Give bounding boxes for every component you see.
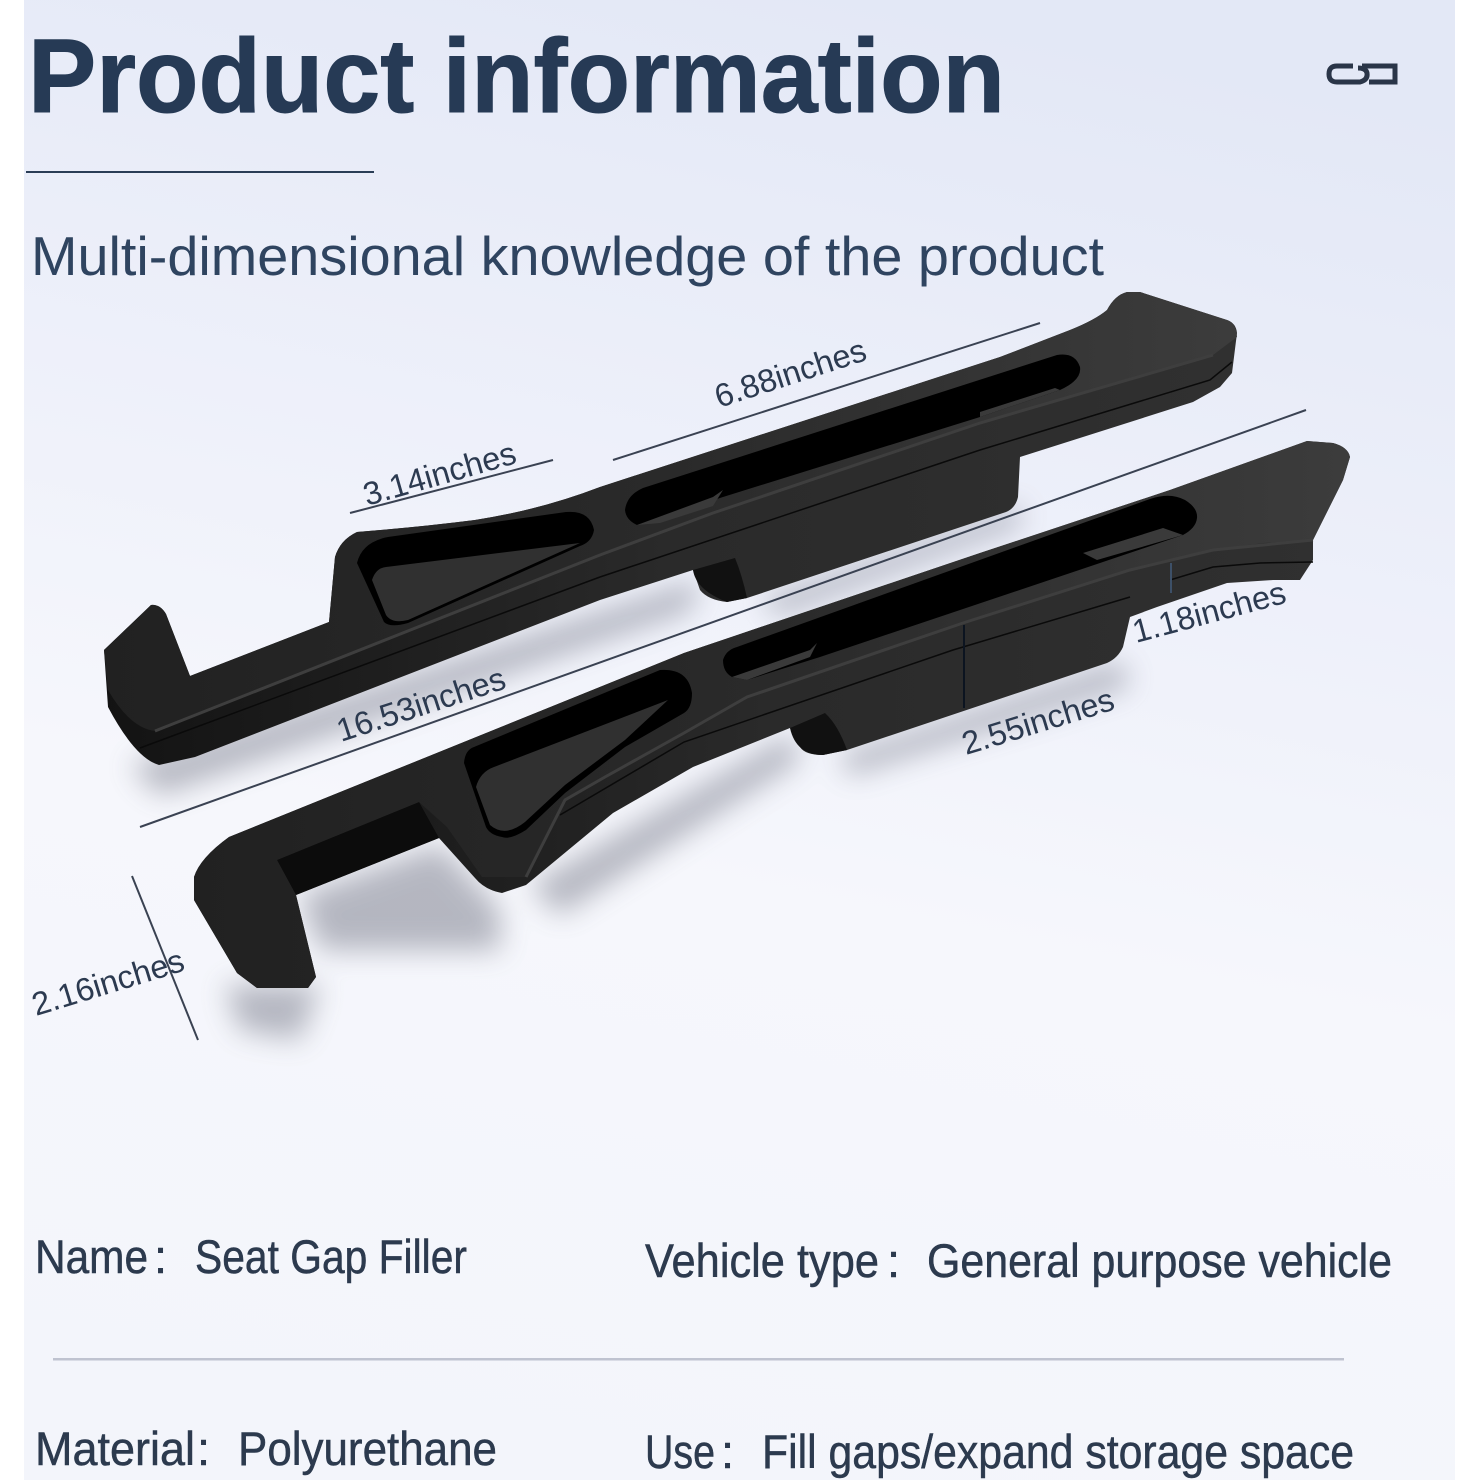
upper filler surface ridge (155, 355, 1213, 731)
spec: vehicle type: : (887, 1234, 900, 1287)
spec: material: Material (35, 1422, 195, 1475)
spec: material (35, 1422, 497, 1475)
dimension line: 2.16 (132, 876, 198, 1040)
lower filler pocket (464, 670, 692, 838)
upper slot inner tabs (637, 388, 1060, 525)
spec: use: Use (645, 1425, 715, 1478)
dimension line: 1.18 (1170, 563, 1172, 593)
upper filler body side (104, 292, 1237, 765)
spec: use: Fill gaps/expand storage space (762, 1425, 1354, 1478)
dimension line: 16.53 (140, 410, 1306, 827)
spec: vehicle type (645, 1234, 1392, 1287)
spec: material: Polyurethane (238, 1422, 497, 1475)
dimension line: 3.14 (350, 460, 553, 513)
upper pocket floor (372, 543, 580, 621)
subtitle: Multi-dimensional knowledge of the product (31, 225, 1104, 287)
dimension line: 6.88 (613, 323, 1040, 460)
upper filler top surface (104, 292, 1237, 731)
lower filler long slot (723, 496, 1197, 680)
lower filler body side (194, 441, 1350, 988)
lower filler top surface (194, 441, 1350, 988)
label: 2.16inches: 2.16inches (28, 942, 188, 1023)
spec: name: : (154, 1230, 167, 1283)
spec: name (35, 1230, 467, 1283)
label: 3.14inches: 3.14inches (359, 435, 520, 513)
spec: name: Seat Gap Filler (195, 1230, 467, 1283)
lower hook underside (277, 802, 439, 895)
lower filler lobe (790, 713, 847, 755)
upper filler long slot (625, 354, 1080, 525)
title underline (26, 171, 374, 173)
shadows under products (130, 505, 1130, 1040)
label: 16.53inches: 16.53inches (332, 660, 510, 749)
label: 2.55inches: 2.55inches (958, 681, 1118, 762)
label: 6.88inches: 6.88inches (710, 332, 871, 415)
spec: vehicle type: General purpose vehicle (927, 1234, 1392, 1287)
title: Product information (28, 18, 1005, 135)
label: 1.18inches: 1.18inches (1128, 574, 1290, 650)
product: lower gap filler (194, 441, 1350, 988)
lower slot inner tabs (732, 528, 1183, 680)
icon: chain link (1329, 66, 1395, 82)
spec: material: : (197, 1422, 210, 1475)
upper filler pocket (357, 512, 594, 625)
upper filler lobe (693, 558, 747, 602)
lower filler side grooves (560, 562, 1313, 815)
dimension line: 2.55 (963, 625, 965, 708)
upper filler side grooves (140, 362, 1232, 748)
lower pocket floor (476, 700, 668, 831)
spec: vehicle type: Vehicle type (645, 1234, 879, 1287)
spec: name: Name (35, 1230, 148, 1283)
divider (53, 1358, 1344, 1360)
spec: use: : (721, 1425, 734, 1478)
lower filler surface ridge (526, 540, 1313, 877)
product: upper gap filler (104, 292, 1237, 765)
